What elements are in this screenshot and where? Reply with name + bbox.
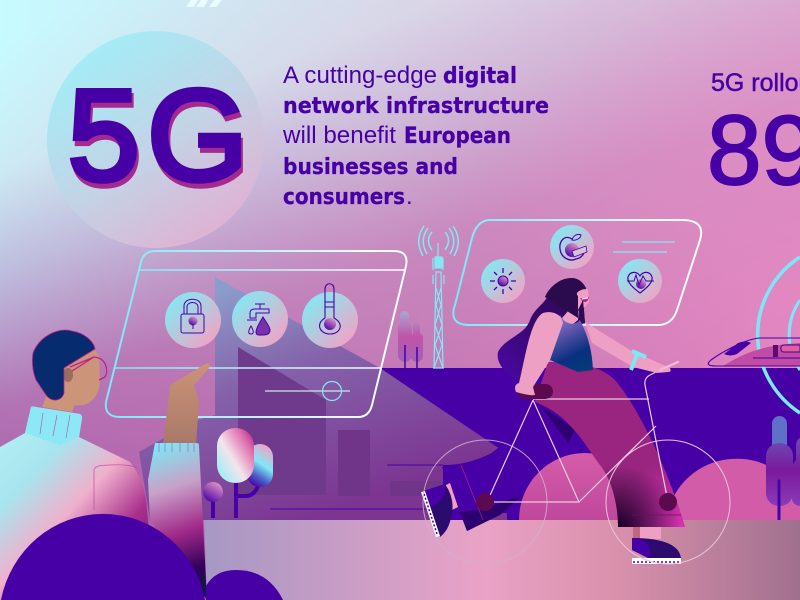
train: [708, 338, 800, 366]
panel: wearable icons: [453, 220, 701, 325]
back shoe: [421, 484, 453, 537]
icon: thermometer: [302, 284, 358, 348]
slider: [265, 382, 350, 400]
skirt / trousers: [530, 360, 690, 530]
intro text block: .: [406, 183, 413, 210]
5G disc with heading: [47, 31, 264, 248]
front wheel: [606, 440, 730, 564]
icon: heart rate: [618, 259, 662, 303]
front ankle: [633, 527, 661, 539]
hair: [32, 330, 95, 400]
building translucent shape: [139, 277, 507, 520]
top: [548, 315, 593, 372]
5G disc with heading: 5: [70, 67, 142, 213]
back ankle: [444, 483, 458, 510]
signal rings: [758, 257, 800, 413]
sleeve: [148, 443, 207, 600]
intro text block: digital: [443, 63, 517, 89]
hair fringe: [545, 278, 586, 318]
neck and face: [42, 346, 100, 412]
glasses: [70, 357, 107, 380]
intro text block: businesses and: [283, 154, 458, 180]
hubs: [476, 493, 494, 511]
foreground dark hills: [1, 514, 283, 600]
intro text block: will benefit: [282, 122, 396, 149]
icon: tap and water: [232, 291, 288, 347]
icon: sun: [481, 259, 525, 303]
back leg: [442, 400, 576, 531]
saddle: [517, 384, 553, 399]
intro text block: consumers: [283, 184, 405, 210]
right side trees: [766, 416, 800, 519]
left arm: [515, 312, 563, 395]
intro text block: [282, 62, 549, 210]
icon: apple with tape: [550, 225, 594, 269]
intro text block: network infrastructure: [283, 93, 549, 119]
5G disc with heading: G: [147, 62, 248, 208]
rear wheel: [423, 440, 547, 564]
hand: [163, 363, 210, 445]
tree pair: [203, 428, 273, 518]
person: cyclist on bicycle: [421, 278, 730, 564]
neck and face: [562, 289, 589, 328]
floor: [204, 520, 800, 600]
person: man touching panel: [0, 330, 210, 600]
front shoe: [632, 538, 681, 559]
long hair: [498, 278, 586, 382]
right arm: [585, 322, 671, 373]
small trees behind tower: [398, 311, 423, 368]
decorative top stripes: [186, 0, 222, 7]
ground band: [370, 368, 800, 520]
bicycle frame: [487, 370, 668, 502]
5G disc with heading: G: [149, 67, 250, 213]
panel: home control: [106, 251, 407, 417]
cell tower with signal waves: [419, 226, 458, 368]
intro text block: European: [404, 123, 511, 149]
hills: [519, 453, 800, 520]
icon: padlock: [165, 292, 221, 348]
intro text block: A cutting-edge: [283, 62, 437, 89]
5G disc with heading: 5: [68, 62, 140, 208]
sweater: [0, 406, 152, 600]
